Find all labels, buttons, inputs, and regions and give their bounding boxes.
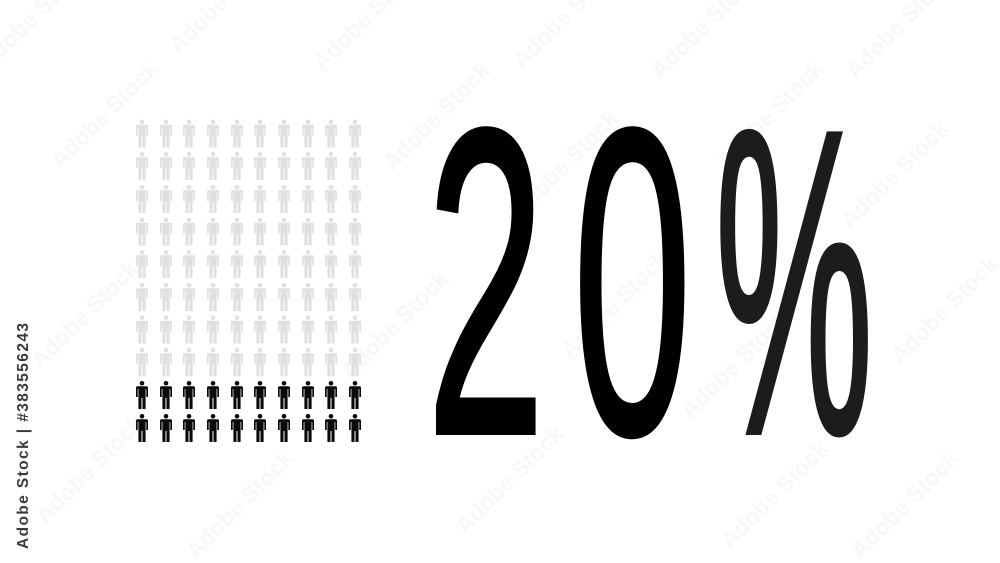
percent sign: % [715,41,873,525]
background watermark: Adobe Stock [30,410,148,528]
background watermark: Adobe Stock [45,55,163,173]
big percentage value [426,39,873,525]
background watermark: Adobe Stock [675,305,793,423]
background watermark: Adobe Stock [377,57,495,175]
background watermark: Adobe Stock [555,245,673,363]
background watermark: Adobe Stock [710,55,828,173]
background watermark: Adobe Stock [180,445,298,563]
background watermark: Adobe Stock [845,445,963,563]
background watermark: Adobe Stock [450,420,568,538]
background watermark: Adobe Stock [885,250,1000,368]
background watermark: Adobe Stock [835,115,953,233]
side credit text: Adobe Stock | #383556243 [15,323,32,549]
background watermark: Adobe Stock [25,255,143,373]
dark people: 20 of 100 [136,381,361,442]
background watermark: Adobe Stock [335,265,453,383]
light people: 80 of 100 [136,120,361,376]
digits 20: 20 [426,39,692,525]
pictogram grid: 100 people [136,120,361,442]
background watermark: Adobe Stock [505,105,623,223]
background watermark: Adobe Stock [715,435,833,553]
